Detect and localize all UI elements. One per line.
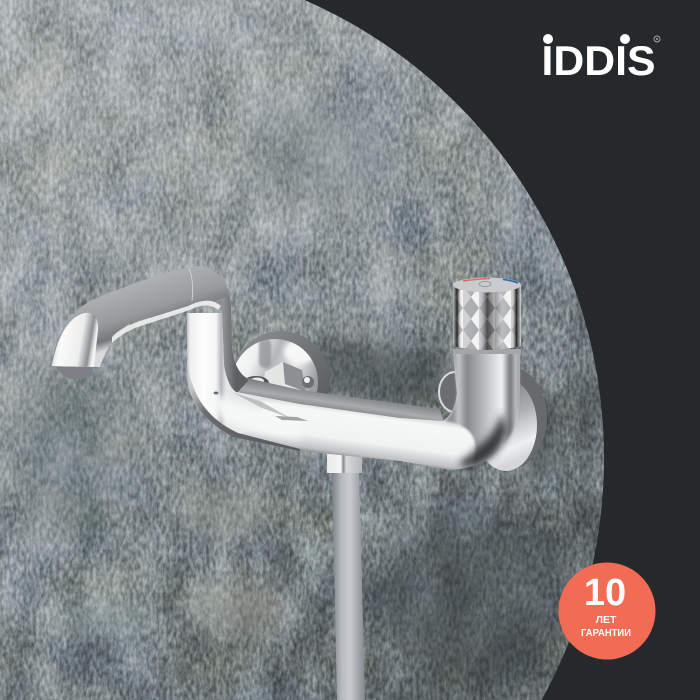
right wall plate <box>439 366 547 471</box>
hot mark <box>463 278 490 281</box>
collar neck ring <box>453 349 521 354</box>
shower hose <box>327 452 365 700</box>
spout chrome tip <box>52 313 98 367</box>
pipe reflection slots <box>214 392 308 421</box>
lower body pipe <box>187 313 521 470</box>
rear arm <box>228 366 445 426</box>
logo wordmark: IDDIS <box>542 37 656 84</box>
logo <box>542 34 660 84</box>
spout body <box>52 266 249 394</box>
vertical elbow <box>187 313 262 437</box>
knob top <box>453 278 521 292</box>
chrome cup <box>232 339 318 425</box>
chrome face <box>475 379 537 471</box>
warranty badge <box>558 562 656 660</box>
wall shadow behind faucet <box>320 335 560 480</box>
elbow outer shadow <box>187 365 300 451</box>
cup reflections and hex nut <box>247 340 314 391</box>
top dial mark <box>479 282 491 286</box>
outer ring <box>469 366 547 470</box>
upper arm and spout <box>52 266 445 426</box>
badge number: 10 <box>584 572 626 614</box>
hose connector nut <box>327 452 362 473</box>
underside reflections <box>112 301 221 343</box>
i dots <box>543 34 630 44</box>
left wall plate <box>236 331 330 394</box>
aerator <box>60 367 92 379</box>
pipe main <box>187 313 520 470</box>
hose tube <box>332 470 365 700</box>
elbow blend <box>205 390 300 440</box>
faceted knob handle <box>453 278 521 350</box>
badge line two: ГАРАНТИИ <box>581 627 631 639</box>
left flange <box>439 372 471 412</box>
collar vertical <box>445 353 520 467</box>
plate ring <box>232 331 330 429</box>
badge circle <box>558 562 656 660</box>
cold mark <box>503 280 518 283</box>
elbow dark reflection <box>460 412 507 467</box>
knob shading <box>453 285 521 350</box>
spout seam <box>189 268 193 301</box>
registered mark <box>654 36 660 42</box>
knob side <box>453 285 521 350</box>
spout neck shading <box>214 297 249 394</box>
badge line one: ЛЕТ <box>596 614 617 626</box>
